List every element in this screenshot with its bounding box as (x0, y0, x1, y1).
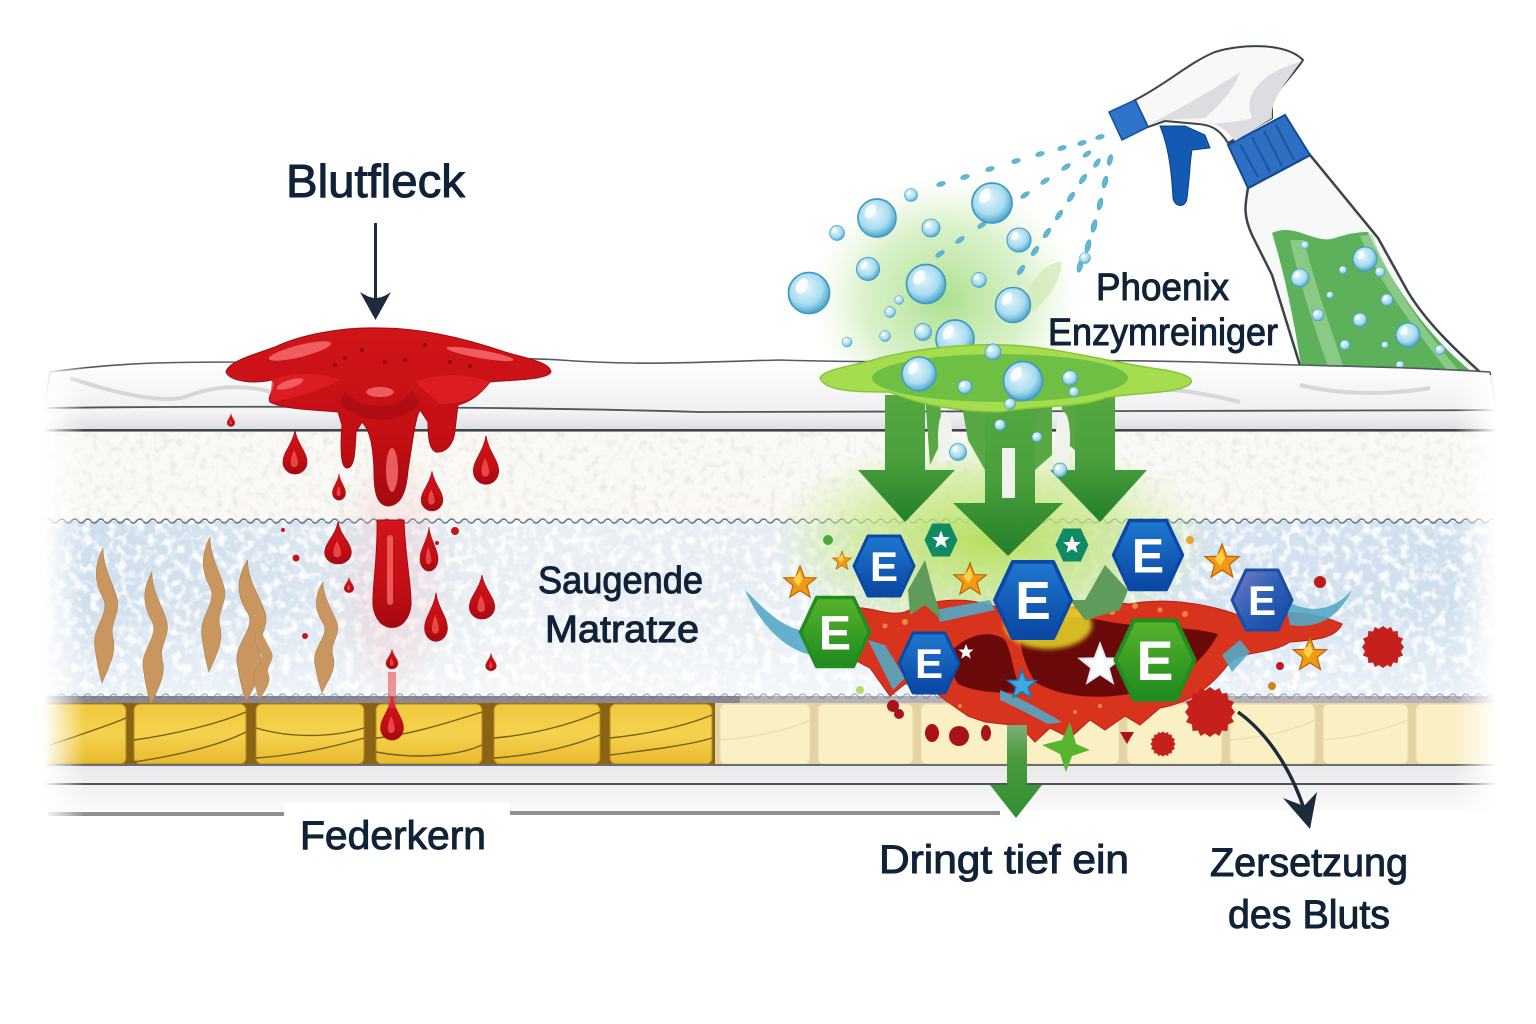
small teal enzymes (924, 524, 1088, 562)
enzyme treatment area (745, 344, 1404, 818)
label: Zersetzung des Bluts: Zersetzung (1210, 841, 1408, 885)
lower cover (40, 764, 1500, 833)
enzyme puddle (820, 345, 1191, 412)
arrow: decomposition pointer (1238, 712, 1317, 829)
spring core (40, 703, 1501, 765)
enzyme hexagons: E (819, 606, 851, 660)
enzyme hexagons: E (1132, 529, 1164, 583)
absorbent blue layer (40, 518, 1500, 696)
label: Saugende Matratze: Saugende (538, 560, 703, 602)
puddle inner (872, 354, 1128, 402)
left arrow (858, 395, 955, 522)
spray mist (788, 134, 1114, 425)
cover seam (45, 407, 1495, 413)
green fragments (908, 560, 1128, 620)
spray bottle (1109, 46, 1480, 372)
label: Blutfleck: Blutfleck (286, 155, 466, 207)
bubbles in bottle (1291, 241, 1445, 369)
drip trail into springs (388, 672, 396, 708)
bottle body (1245, 155, 1480, 372)
middle arrow (953, 400, 1063, 556)
label: Zersetzung des Bluts: des Bluts (1228, 893, 1390, 937)
white foam layer (40, 429, 1500, 521)
blood puddle with drips (226, 328, 551, 506)
spring blocks (40, 704, 712, 764)
rim speckles (882, 603, 1188, 714)
puddle speckles (333, 343, 472, 368)
label: Dringt tief ein: Dringt tief ein (879, 838, 1129, 882)
cover band (45, 409, 1495, 430)
left edge fade (30, 355, 85, 825)
pale spring blocks (720, 704, 1501, 764)
enzyme hexagons: E (870, 543, 898, 590)
enzyme hexagons: E (1248, 577, 1276, 624)
pale spring wires (720, 720, 1408, 740)
puddle highlights (267, 337, 514, 492)
mattress layers (40, 358, 1501, 833)
enzyme hexagons: E (1015, 572, 1051, 631)
dark cavities (945, 617, 1218, 697)
nozzle (1109, 100, 1148, 140)
soft red halo (347, 465, 437, 685)
cover folds (70, 378, 1430, 405)
right arrow (1050, 395, 1147, 522)
rising odor wisps (94, 537, 338, 704)
large water bubbles (788, 183, 1090, 360)
top cover (40, 358, 1500, 430)
puddle shading (340, 390, 420, 420)
stars (784, 544, 1327, 772)
label: Federkern: Federkern (300, 814, 486, 858)
enzyme hexagons: E (915, 640, 943, 687)
spring wires (50, 712, 712, 762)
yellow reaction core (1004, 601, 1092, 649)
trigger (1160, 126, 1210, 206)
enzyme hexagons (800, 520, 1292, 700)
stream highlight (387, 535, 393, 605)
sprayer head (1135, 46, 1303, 143)
splash behind label (1022, 262, 1062, 318)
dark seam (40, 692, 1500, 703)
label: Saugende Matratze (538, 560, 703, 651)
falling blood drops lower (281, 522, 496, 740)
label: Phoenix Enzymreiniger: Enzymreiniger (1048, 312, 1278, 354)
debris (823, 535, 1404, 756)
spray droplets (935, 134, 1114, 276)
label: Phoenix Enzymreiniger: Phoenix (1096, 267, 1229, 309)
blood stream through foam (373, 520, 411, 628)
arrow: penetrates deep (990, 725, 1042, 818)
enzyme hexagons: E (1137, 630, 1173, 692)
arrow: blood stain pointer (360, 223, 391, 320)
green arrows and puddle (820, 345, 1191, 556)
green mist (810, 175, 1080, 425)
bottle liquid (1272, 230, 1472, 372)
blood stain (94, 328, 551, 740)
puddle lobes (270, 374, 490, 404)
teal ribbons (745, 590, 1352, 724)
bubbles over puddle (902, 344, 1079, 477)
falling blood drops upper (227, 413, 499, 511)
label: Saugende Matratze: Matratze (545, 609, 699, 651)
label: Phoenix Enzymreiniger (1048, 267, 1278, 354)
right edge fade (1455, 375, 1510, 825)
connecting drips (925, 395, 1075, 470)
green glow in foam (765, 435, 1215, 645)
arrow slits (938, 412, 1070, 498)
label: Zersetzung des Bluts (1210, 841, 1408, 937)
decomposing blood mass (845, 600, 1342, 742)
bottle collar (1228, 115, 1310, 188)
